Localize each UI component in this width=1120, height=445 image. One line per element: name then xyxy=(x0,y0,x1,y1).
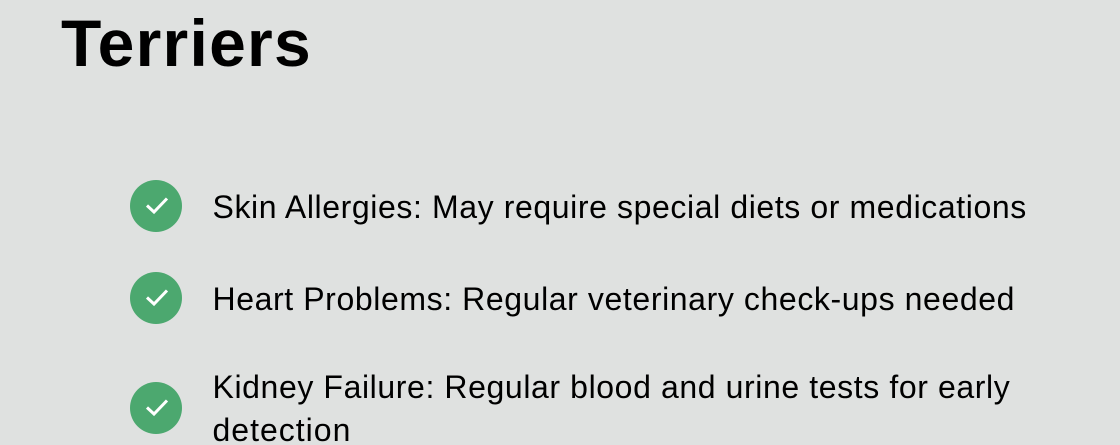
list item 2: Heart Problems: Regular veterinary check-ups needed xyxy=(212,281,1015,317)
icon: check 3 xyxy=(130,382,182,434)
icon: check 2 xyxy=(130,272,182,324)
title: Terriers xyxy=(61,6,312,80)
list item 1: Skin Allergies: May require special diets or medications xyxy=(212,189,1027,225)
list item 3 xyxy=(212,369,1010,445)
icon: check 1 xyxy=(130,180,182,232)
list item 3: Kidney Failure: Regular blood and urine tests for early xyxy=(212,369,1010,405)
